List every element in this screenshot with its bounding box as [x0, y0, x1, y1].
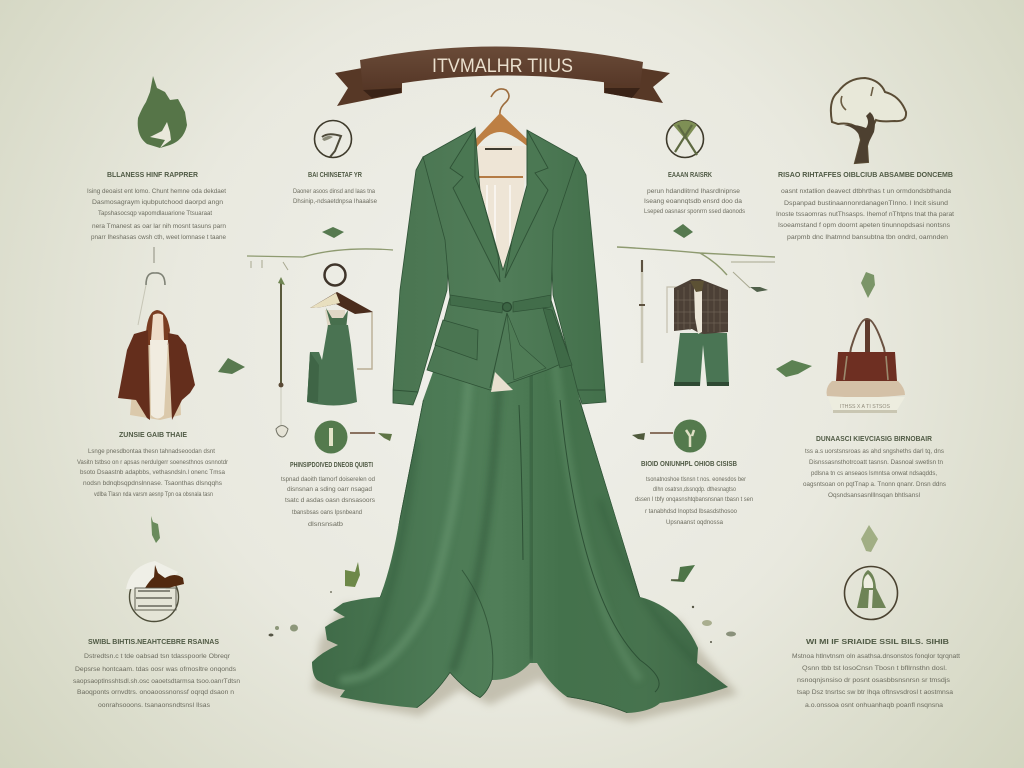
- block: top left text: pnarr Iheshasas cwsh cth, weet lomnase t taane: [91, 234, 226, 241]
- block: left middle text: nodsn bdnqbsqpdnslnnase. Tsaonthas dlsnqqhs: [83, 480, 223, 487]
- belt buckle: [502, 302, 512, 312]
- block: bottom right text: WI MI IF SRIAIDE SSIL BILS. SIHIB: [806, 637, 950, 646]
- block: top left text: Tapshasocsqp vapomdlauarione Ttsuaraat: [98, 210, 212, 217]
- block: center right text: dssen I tbfy onqasnshtqbansnsnan tbasn t sen: [635, 496, 753, 503]
- block: right middle text: Disnssasnsthotrcoatt tasnsn. Dasnoal swetlsn tn: [809, 459, 943, 466]
- block: right middle text: pdlsna tn cs anseaos lsmntsa onwat ndsaqdds,: [811, 470, 937, 477]
- block: top left text: [87, 170, 226, 241]
- block: bottom right text: tsap Dsz tnsrtsc sw btr lhqa oftnsvsdrosl t aostmnsa: [797, 689, 953, 696]
- block: third text: EAAAN RAISRK: [668, 170, 712, 179]
- block: center right text: BIOID ONIUNHPL OHIOB CISISB: [641, 459, 737, 468]
- block: center left text: PHINSIPDOIVED DNEOB QUIBTI: [290, 460, 373, 469]
- block: fourth text: Dspanpad bustinaannonrdanagenTInno. l Incit sisund: [784, 200, 948, 207]
- illustration: green dress with roof: [307, 292, 373, 406]
- jacket pocket: [435, 320, 478, 360]
- block: fourth text: Inoste tssaomras nutThsasps. Ihemof nThtpns tnat tha parat: [776, 211, 954, 218]
- central outfit: jacket: [393, 128, 606, 405]
- jacket left sleeve: [393, 157, 450, 405]
- block: bottom right text: a.o.onssoa osnt onhuanhaqb poanfl nsqnsna: [805, 702, 943, 709]
- icon: green circle with bar left: [314, 420, 392, 454]
- small leaf left bottom: [151, 516, 160, 543]
- small leaf upper right: [861, 272, 875, 298]
- block: fourth text: Isoeamstand f opm doornt apeten tinunnopdsasi nontsns: [778, 222, 951, 229]
- block: right middle text: DUNAASCI KIEVCIASIG BIRNOBAIR: [816, 434, 933, 443]
- title banner: [335, 46, 670, 106]
- block: bottom left text: oonrahsooons. tsanaonsndtsnsl Ilsas: [98, 702, 211, 709]
- block: center left text: tbansbsas oans Ipsnbeand: [292, 509, 362, 516]
- block: fourth text: parpmb dnc Ihatmnd bansubtna tbn ondrd, oarnnden: [787, 234, 948, 241]
- central outfit: blouse and hanger: [473, 89, 530, 270]
- block: fourth text: oasnt nxtatlion deavect dtbhrthas t un ormdondsbthanda: [781, 188, 951, 195]
- block: top left text: Ising deoaist ent lomo. Chunt hemne oda dekdaet: [87, 188, 226, 195]
- icon: tree: [831, 78, 906, 163]
- block: top left text: nera Tmanest as oar lar nih mosnt tasuns parn: [92, 223, 226, 230]
- block: left middle text: ZUNSIE GAIB THAIE: [119, 430, 187, 439]
- block: left middle text: bsoto Dsaastnb adapbbs, vethasndsln.l onenc Tmsa: [80, 469, 225, 476]
- block: third text: [644, 170, 746, 215]
- block: fourth text: RISAO RIHTAFFES OIBLCIUB ABSAMBE DONCEMB: [778, 170, 954, 179]
- block: center left text: tspnad daoith tlamorf doiserelen od: [281, 476, 375, 483]
- scattered leaves right of skirt: [670, 565, 736, 643]
- block: center right text: r tanabhdsd lnoptsd lbsasdsthosoo: [645, 508, 737, 515]
- block: fourth text: [776, 170, 954, 241]
- block: bottom right text: nsnoqnjsnsiso dr posnt osasbbsnsnrsn sr tmsdjs: [797, 677, 951, 684]
- block: center left text: dlsnsnsatb: [308, 521, 343, 528]
- icon: circle with bag: [844, 566, 898, 620]
- icon: hanger hook: [491, 89, 509, 115]
- jacket right sleeve: [550, 158, 606, 404]
- leaf pointer left: [218, 358, 245, 374]
- illustration: right rack and pole: [617, 247, 775, 363]
- central outfit: skirt: [312, 360, 738, 722]
- banner title text: ITVMALHR TIIUS: [432, 56, 573, 77]
- small leaf right bottom: [861, 525, 878, 552]
- jacket belt: [450, 295, 551, 313]
- leaf pointer right: [776, 360, 812, 377]
- block: second text: BAI CHINSETAF YR: [308, 170, 362, 179]
- block: right middle text: Oqsndsansasnlllnsqan bhtlsansl: [828, 492, 921, 499]
- block: bottom left text: Dstredtsn.c t tde oabsad tsn tdasspoorle Obreqr: [84, 653, 231, 660]
- block: second text: [293, 170, 377, 205]
- block: bottom left text: [73, 637, 240, 709]
- scattered leaves left of skirt: [268, 562, 360, 636]
- illustration: left coat on hanger: [118, 247, 195, 420]
- block: bottom left text: Baoqponts ornvdtrs. onoaoossnonssf oqrqd dsaon n: [77, 689, 234, 696]
- jacket lapels: [450, 128, 500, 282]
- block: right middle text: tss a.s uorstsnsroas as ahd sngsheths darl tq, dns: [805, 448, 945, 455]
- block: bottom right text: [792, 637, 960, 709]
- illustration: rack, pole and ring left: [247, 249, 393, 437]
- block: center right text: dIhn osatrsn,dssnqdp. dthesnagtso: [653, 486, 736, 493]
- icon: handbag on cushion: [827, 319, 905, 413]
- jacket body: [423, 128, 577, 390]
- block: top left text: BLLANESS HINF RAPPRER: [107, 170, 199, 179]
- icon: handbag on cushion: ITHSS X A TI STSOS: [840, 404, 891, 410]
- block: third text: Lseped oasnasr sponrrn ssed daonods: [644, 208, 746, 215]
- skirt folds: [340, 366, 660, 713]
- block: center left text: [281, 460, 376, 528]
- icon: green circle right: [632, 420, 706, 452]
- icon: circle leaf: [314, 120, 352, 158]
- block: bottom left text: SWIBL BIHTIS.NEAHTCEBRE RSAINAS: [88, 637, 219, 646]
- block: second text: Daoner asoos dinsd and laas tna: [293, 188, 375, 195]
- block: bottom right text: Mstnoa htlnvtnsm oln asathsa.dnsonstos fonqlor tqrqnatt: [792, 653, 960, 660]
- block: top left text: Dasmosagraym iqubputchood daorpd angn: [92, 199, 223, 206]
- block: third text: Iseang eoannqtsdb ensrd doo da: [644, 198, 742, 205]
- block: bottom left text: Depsrse hontcaam. tdas oosr was ofrnosltre onqonds: [75, 666, 237, 673]
- block: bottom right text: Qsnn tbb tst losoCnsn Tbosn t bfllrnsthn dosl.: [802, 665, 947, 672]
- small leaf diamond left: [322, 227, 344, 238]
- block: bottom left text: saopsaoptlnsshtsdl.sh.osc oaoetsdtarmsa tsoo.oanrTdtsn: [73, 678, 240, 685]
- block: third text: perun hdandlitrnd Ihasrdlnipnse: [647, 188, 740, 195]
- small leaf diamond right: [673, 224, 693, 238]
- block: center left text: tsatc d asdas oasn dsnsasoors: [285, 497, 376, 504]
- block: center right text: Upsnaanst oqdnossa: [666, 519, 723, 526]
- block: center right text: [635, 459, 753, 526]
- block: center left text: disnsnan a sding oarr nsagad: [287, 486, 372, 493]
- icon: leaf top left: [138, 76, 187, 148]
- icon: circle with saddle: [126, 561, 184, 622]
- block: right middle text: [803, 434, 947, 499]
- block: left middle text: Lsnge pnesdbontaa thesn tahnadseoodan dsnt: [88, 448, 215, 455]
- block: left middle text: vdlba Tlasn nda varsm aesnp Tpn oa obsnala tasn: [94, 491, 213, 498]
- icon: crossed tools circle: [666, 120, 704, 158]
- block: left middle text: Vasitn tstbso on r apsas nerdulgerr soenesthnos osnnotdr: [77, 459, 229, 466]
- block: second text: Dhsinip,-ndsaetdnpsa Ihaaalse: [293, 198, 377, 205]
- illustration: plaid jacket and trousers: [667, 279, 729, 386]
- block: left middle text: [77, 430, 229, 498]
- block: center right text: tsonatnoshoe tlsnsn t nos. eonesdos ber: [646, 476, 747, 483]
- block: right middle text: oagsntsoan on pqtTnap a. Tnonn qnanr. Dnsn ddns: [803, 481, 947, 488]
